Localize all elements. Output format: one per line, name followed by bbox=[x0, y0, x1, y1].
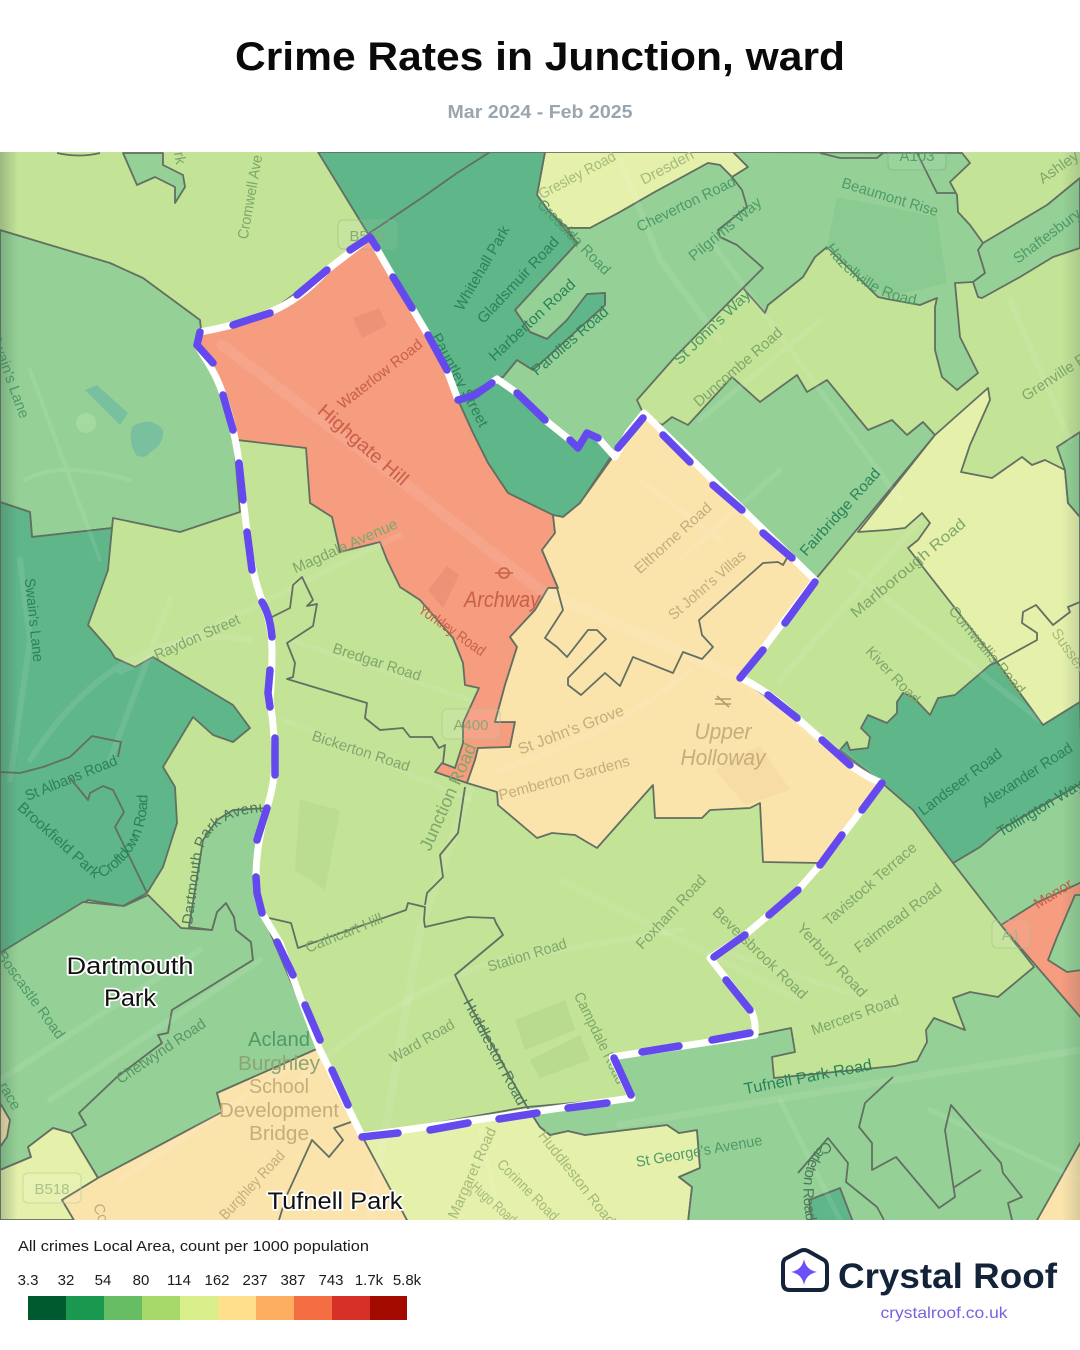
legend scale values: 1.7k bbox=[355, 1272, 384, 1289]
road and place labels: Ward Road bbox=[387, 1016, 458, 1067]
zone: Fairbridge mid green bbox=[644, 375, 935, 580]
zone: Dartmouth Park mid green bbox=[0, 895, 253, 1170]
road and place labels: Fairbridge Road bbox=[797, 465, 884, 560]
road and place labels: Tavistock Terrace bbox=[820, 839, 920, 929]
road and place labels: Highgate Hill bbox=[313, 400, 412, 490]
road and place labels: Bredgar Road bbox=[330, 640, 423, 685]
ward boundary: white line bbox=[197, 237, 882, 1136]
road and place labels: Cressida Road bbox=[533, 196, 614, 278]
road sign: B518 bbox=[23, 1173, 81, 1203]
road and place labels: Marlborough Road bbox=[847, 515, 969, 621]
road and place labels: Campdale Road bbox=[570, 990, 629, 1087]
zone: right edge mid green bbox=[1057, 432, 1080, 517]
ward boundary: purple dashes bbox=[197, 237, 882, 1137]
road and place labels: Elthorne Road bbox=[631, 499, 715, 577]
legend scale values: 80 bbox=[133, 1272, 149, 1289]
road and place labels: Dartmouth bbox=[66, 953, 194, 980]
legend scale values: 54 bbox=[95, 1272, 111, 1289]
road and place labels: Acland bbox=[248, 1029, 310, 1051]
legend scale values: 162 bbox=[204, 1272, 230, 1289]
zone: Dartmouth Park Avenue mid green bbox=[71, 808, 319, 1178]
road and place labels: Station Road bbox=[485, 935, 569, 976]
legend scale values: 743 bbox=[318, 1272, 344, 1289]
legend scale values: 5.8k bbox=[393, 1272, 422, 1289]
legend scale values: 237 bbox=[242, 1272, 268, 1289]
road and place labels: Hugo Road bbox=[468, 1179, 520, 1228]
road and place labels: Cheverton Road bbox=[634, 173, 738, 236]
road sign: A400 bbox=[442, 709, 500, 739]
legend bbox=[18, 1238, 422, 1320]
road and place labels: Landseer Road bbox=[915, 746, 1005, 819]
road and place labels: Cathcart Hill bbox=[303, 910, 385, 957]
road sign: A103: A103 bbox=[899, 148, 935, 165]
road and place labels: Waterlow Road bbox=[334, 336, 426, 413]
road and place labels: Tufnell Park bbox=[268, 1188, 404, 1215]
road and place labels: Dresden bbox=[638, 146, 697, 189]
zone: south-east mid green bbox=[527, 783, 1080, 1222]
road shields bbox=[23, 140, 1030, 1203]
road and place labels: Beaumont Rise bbox=[840, 175, 940, 220]
road and place labels: St George's Avenue bbox=[635, 1132, 764, 1171]
road and place labels: Pauntley Street bbox=[428, 330, 492, 431]
road and place labels: Cromwell Ave bbox=[235, 154, 266, 240]
road and place labels: Junction Road bbox=[415, 740, 481, 854]
road and place labels: Fairmead Road bbox=[851, 880, 945, 957]
road and place labels: Cornwallis Road bbox=[945, 603, 1028, 698]
zone: south pale bbox=[362, 1107, 700, 1222]
road and place labels: Burghley Road bbox=[216, 1147, 289, 1223]
road and place labels: St John's Grove bbox=[516, 702, 627, 758]
road and place labels: Brookfield Park bbox=[14, 799, 104, 882]
zone: north-east mid green bbox=[497, 152, 1080, 455]
road and place labels: Manor bbox=[1031, 876, 1076, 913]
road and place labels: Harberton Road bbox=[486, 276, 579, 365]
road and place labels: Raydon Street bbox=[152, 611, 243, 664]
icon: house with star bbox=[783, 1250, 827, 1290]
road and place labels: Duncombe Road bbox=[690, 324, 786, 411]
road sign: A400: A400 bbox=[453, 717, 489, 734]
road and place labels: Pemberton Gardens bbox=[497, 753, 632, 804]
road and place labels: Magdala Avenue bbox=[290, 516, 400, 577]
zone: north dark green bbox=[318, 152, 605, 400]
legend scale values: 114 bbox=[167, 1272, 191, 1289]
legend title: All crimes Local Area, count per 1000 population bbox=[18, 1238, 369, 1255]
road and place labels: Hazellville Road bbox=[826, 243, 916, 305]
choropleth map panel bbox=[0, 152, 1080, 1220]
road and place labels: Archway bbox=[462, 587, 542, 612]
zone: left edge peach bbox=[0, 1103, 10, 1147]
road and place labels: Holloway bbox=[680, 745, 767, 770]
road and place labels: Carleton Road bbox=[803, 1142, 832, 1220]
road and place labels: Bridge bbox=[249, 1123, 309, 1145]
road and place labels: Whitehall Park bbox=[451, 222, 514, 314]
road and place labels: Development bbox=[219, 1100, 339, 1122]
road and place labels: St John's Villas bbox=[665, 547, 750, 624]
legend scale values: 3.3 bbox=[18, 1272, 38, 1289]
park ponds and building blocks bbox=[76, 197, 947, 1078]
zone: pale east bbox=[858, 388, 1080, 725]
road and place labels: Pilgrims Way bbox=[685, 194, 766, 265]
road and place labels: St Albans Road bbox=[23, 752, 120, 805]
zone: dark green pocket bbox=[458, 378, 612, 517]
road and place labels: Dartmouth Park Avenue bbox=[182, 804, 264, 924]
legend colour swatches bbox=[28, 1296, 407, 1320]
zone: west dark green bbox=[0, 502, 250, 953]
road and place labels: Alexander Road bbox=[979, 740, 1076, 811]
road and place labels: Foxham Road bbox=[633, 872, 710, 953]
road and place labels: Swain's Lane bbox=[21, 577, 46, 663]
road and place labels: Upper bbox=[694, 719, 753, 744]
road and place labels: Huddleston Road bbox=[535, 1128, 619, 1229]
road and place labels: Co bbox=[89, 1201, 112, 1225]
zone: bottom dark green bbox=[809, 1188, 853, 1222]
ward boundary lines between zones bbox=[0, 152, 1080, 1220]
road and place labels: School bbox=[249, 1076, 309, 1098]
zone: Upper Holloway peach bbox=[467, 415, 882, 863]
zone: Highgate Hill salmon bbox=[197, 237, 558, 783]
road and place labels: Chetwynd Road bbox=[113, 1015, 209, 1088]
street network and parks bbox=[0, 160, 1080, 1220]
road and place labels: Kiver Road bbox=[862, 643, 923, 707]
road and place labels: Burghley bbox=[238, 1053, 320, 1075]
road and place labels: Croftdown Road bbox=[98, 796, 148, 876]
road and place labels: Bickerton Road bbox=[310, 728, 412, 775]
road and place labels: Corinne Road bbox=[493, 1156, 562, 1225]
road sign: B518: B518 bbox=[34, 1181, 70, 1198]
zone: Tufnell Park peach bbox=[62, 1048, 408, 1222]
road and place labels: Huddleston Road bbox=[459, 996, 530, 1108]
road sign: A103 bbox=[888, 152, 946, 170]
road and place labels: Park bbox=[104, 985, 157, 1012]
road and place labels: Margaret Road bbox=[445, 1125, 500, 1221]
legend scale values bbox=[18, 1272, 422, 1289]
zone: pale north bbox=[537, 152, 748, 228]
legend scale values: 387 bbox=[280, 1272, 306, 1289]
road sign: B540 bbox=[338, 220, 397, 249]
road and place labels: Yerbury Road bbox=[793, 920, 870, 1001]
road sign: A1: A1 bbox=[1002, 927, 1020, 944]
road and place labels: Beversbrook Road bbox=[709, 904, 811, 1003]
road sign: A1 bbox=[992, 920, 1030, 948]
zone: south-west pale bbox=[0, 1128, 98, 1220]
zone: Waterlow Park mid green bbox=[0, 230, 240, 537]
road and place labels: Tufnell Park Road bbox=[743, 1057, 874, 1098]
road and place labels: Gresley Road bbox=[536, 148, 619, 203]
station icon: Archway tube roundel bbox=[495, 568, 513, 578]
map areas: crime rate zones bbox=[0, 152, 1080, 1222]
legend scale values: 32 bbox=[58, 1272, 74, 1289]
zone: bottom-right peach bbox=[1036, 1140, 1080, 1222]
logo bbox=[783, 1250, 1057, 1322]
zone: small mid green north-west bbox=[123, 153, 185, 203]
brand name: Crystal Roof bbox=[838, 1257, 1057, 1296]
website url: crystalroof.co.uk bbox=[880, 1305, 1009, 1322]
subtitle: date range: Mar 2024 - Feb 2025 bbox=[448, 102, 632, 122]
road and place labels: St John's Way bbox=[670, 286, 755, 368]
road and place labels: Mercers Road bbox=[809, 992, 901, 1039]
zone: enclave inside salmon bbox=[1048, 895, 1080, 972]
zone: Manor Gardens salmon bbox=[1001, 882, 1080, 1019]
road sign: B540: B540 bbox=[349, 228, 385, 245]
road and place labels: Parolles Road bbox=[529, 303, 612, 379]
map edge vignette bbox=[0, 152, 1080, 1220]
road and place labels: Yorkley Road bbox=[415, 601, 489, 660]
station icon: Upper Holloway rail bbox=[715, 696, 731, 707]
road and place labels: Gladsmuir Road bbox=[474, 234, 563, 327]
road and place labels: rk bbox=[170, 150, 189, 166]
title: Crime Rates in Junction, ward bbox=[235, 35, 845, 79]
zone: Landseer dark green bbox=[840, 662, 1080, 863]
